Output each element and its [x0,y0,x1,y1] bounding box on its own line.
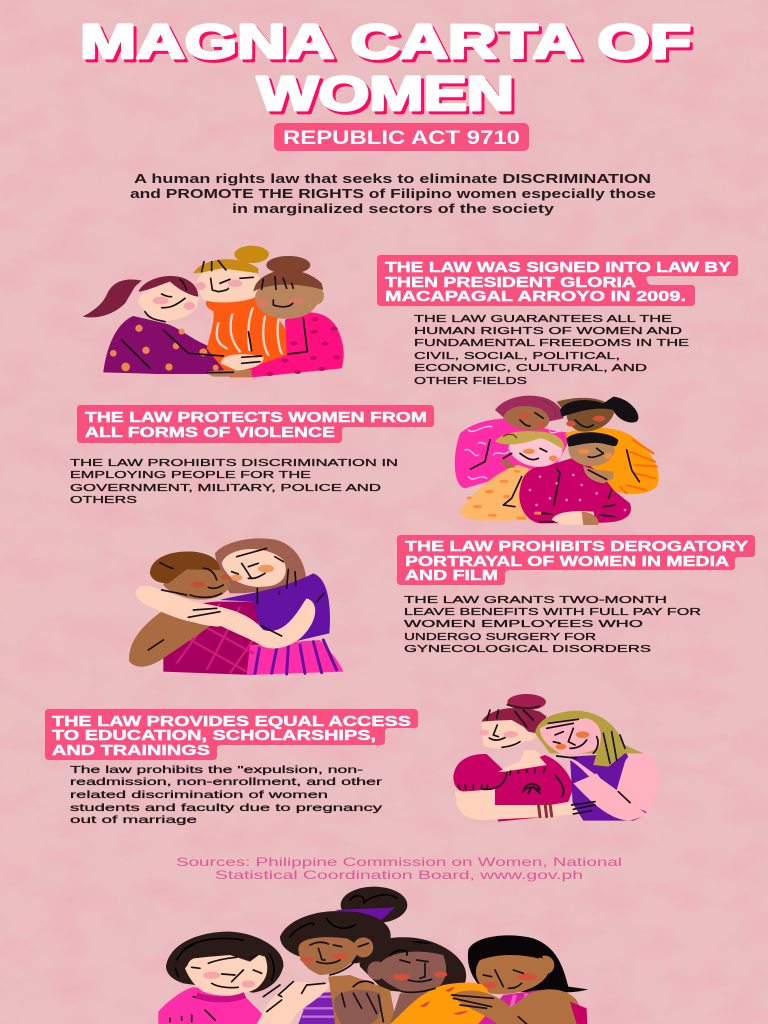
body text: expulsion prohibition: related discrimination of women [70,789,328,801]
heading block: signed into law: MACAPAGAL ARROYO IN 2009. [385,289,686,305]
heading block: protects from violence: ALL FORMS OF VIOLENCE [85,425,335,441]
body text: human rights guarantee: HUMAN RIGHTS OF WOMEN AND [414,325,683,337]
intro text: and PROMOTE THE RIGHTS of Filipino women especially those [130,187,656,201]
heading block: signed into law: THEN PRESIDENT GLORIA [385,275,637,291]
sources text: Sources: Philippine Commission on Women, National [176,855,622,869]
intro text [130,172,656,216]
intro text: A human rights law that seeks to eliminate DISCRIMINATION [134,172,651,186]
body text: expulsion prohibition: readmission, non-enrollment, and other [70,776,383,788]
illustration: four women hugging [455,396,659,525]
body text: two-month leave [404,594,702,655]
title: MAGNA CARTA OF [83,19,694,72]
body text: expulsion prohibition: students and faculty due to pregnancy [70,802,383,814]
heading block: protects from violence: THE LAW PROTECTS WOMEN FROM [85,410,427,426]
illustration: four women group at bottom [158,887,588,1024]
illustration: two women side by side [453,694,658,822]
title: MAGNA CARTA OF [80,16,691,69]
heading block: signed into law [377,255,738,306]
body text: human rights guarantee: CIVIL, SOCIAL, POLITICAL, [414,350,620,362]
body text: human rights guarantee: FUNDAMENTAL FREEDOMS IN THE [414,337,689,349]
heading block: derogatory portrayal: THE LAW PROHIBITS DEROGATORY [405,539,748,555]
sources text: Statistical Coordination Board, www.gov.ph [215,868,583,882]
body text: expulsion prohibition: The law prohibits the "expulsion, non- [70,764,364,776]
body text: discrimination in employment: THE LAW PROHIBITS DISCRIMINATION IN [70,457,398,469]
heading block: protects from violence [77,405,434,443]
title: WOMEN [257,68,514,121]
body text: discrimination in employment: GOVERNMENT, MILITARY, POLICE AND [70,482,382,494]
subtitle badge: Republic Act 9710 [274,123,529,151]
body text: human rights guarantee [414,313,689,387]
intro text: in marginalized sectors of the society [232,202,554,216]
body text: two-month leave: THE LAW GRANTS TWO-MONTH [404,594,667,606]
subtitle badge: Republic Act 9710: REPUBLIC ACT 9710 [283,128,520,149]
body text: discrimination in employment [70,457,398,506]
body text: human rights guarantee: THE LAW GUARANTEES ALL THE [414,313,672,325]
heading block: derogatory portrayal [397,535,755,585]
heading block: signed into law: THE LAW WAS SIGNED INTO LAW BY [385,260,731,276]
body text: discrimination in employment: OTHERS [70,494,137,506]
heading block: derogatory portrayal: PORTRAYAL OF WOMEN IN MEDIA [405,554,730,570]
title: WOMEN [260,71,517,124]
heading block: derogatory portrayal: AND FILM [405,568,498,584]
body text: two-month leave: WOMEN EMPLOYEES WHO [404,618,643,630]
heading block: equal access to education: TO EDUCATION, SCHOLARSHIPS, [52,728,376,744]
heading block: equal access to education: THE LAW PROVIDES EQUAL ACCESS [52,714,411,730]
body text: discrimination in employment: EMPLOYING PEOPLE FOR THE [70,469,311,481]
body text: human rights guarantee: OTHER FIELDS [414,375,527,387]
illustration: two women hugging [129,538,343,675]
body text: expulsion prohibition [70,764,383,826]
body text: two-month leave: UNDERGO SURGERY FOR [404,631,597,643]
heading block: equal access to education [45,709,418,760]
sources text [176,855,622,882]
illustration: three women embracing [83,246,344,377]
heading block: equal access to education: AND TRAININGS [52,743,210,759]
body text: two-month leave: GYNECOLOGICAL DISORDERS [404,643,651,655]
body text: two-month leave: LEAVE BENEFITS WITH FULL PAY FOR [404,606,702,618]
title [80,16,694,124]
body text: expulsion prohibition: out of marriage [70,814,197,826]
body text: human rights guarantee: ECONOMIC, CULTURAL, AND [414,362,648,374]
